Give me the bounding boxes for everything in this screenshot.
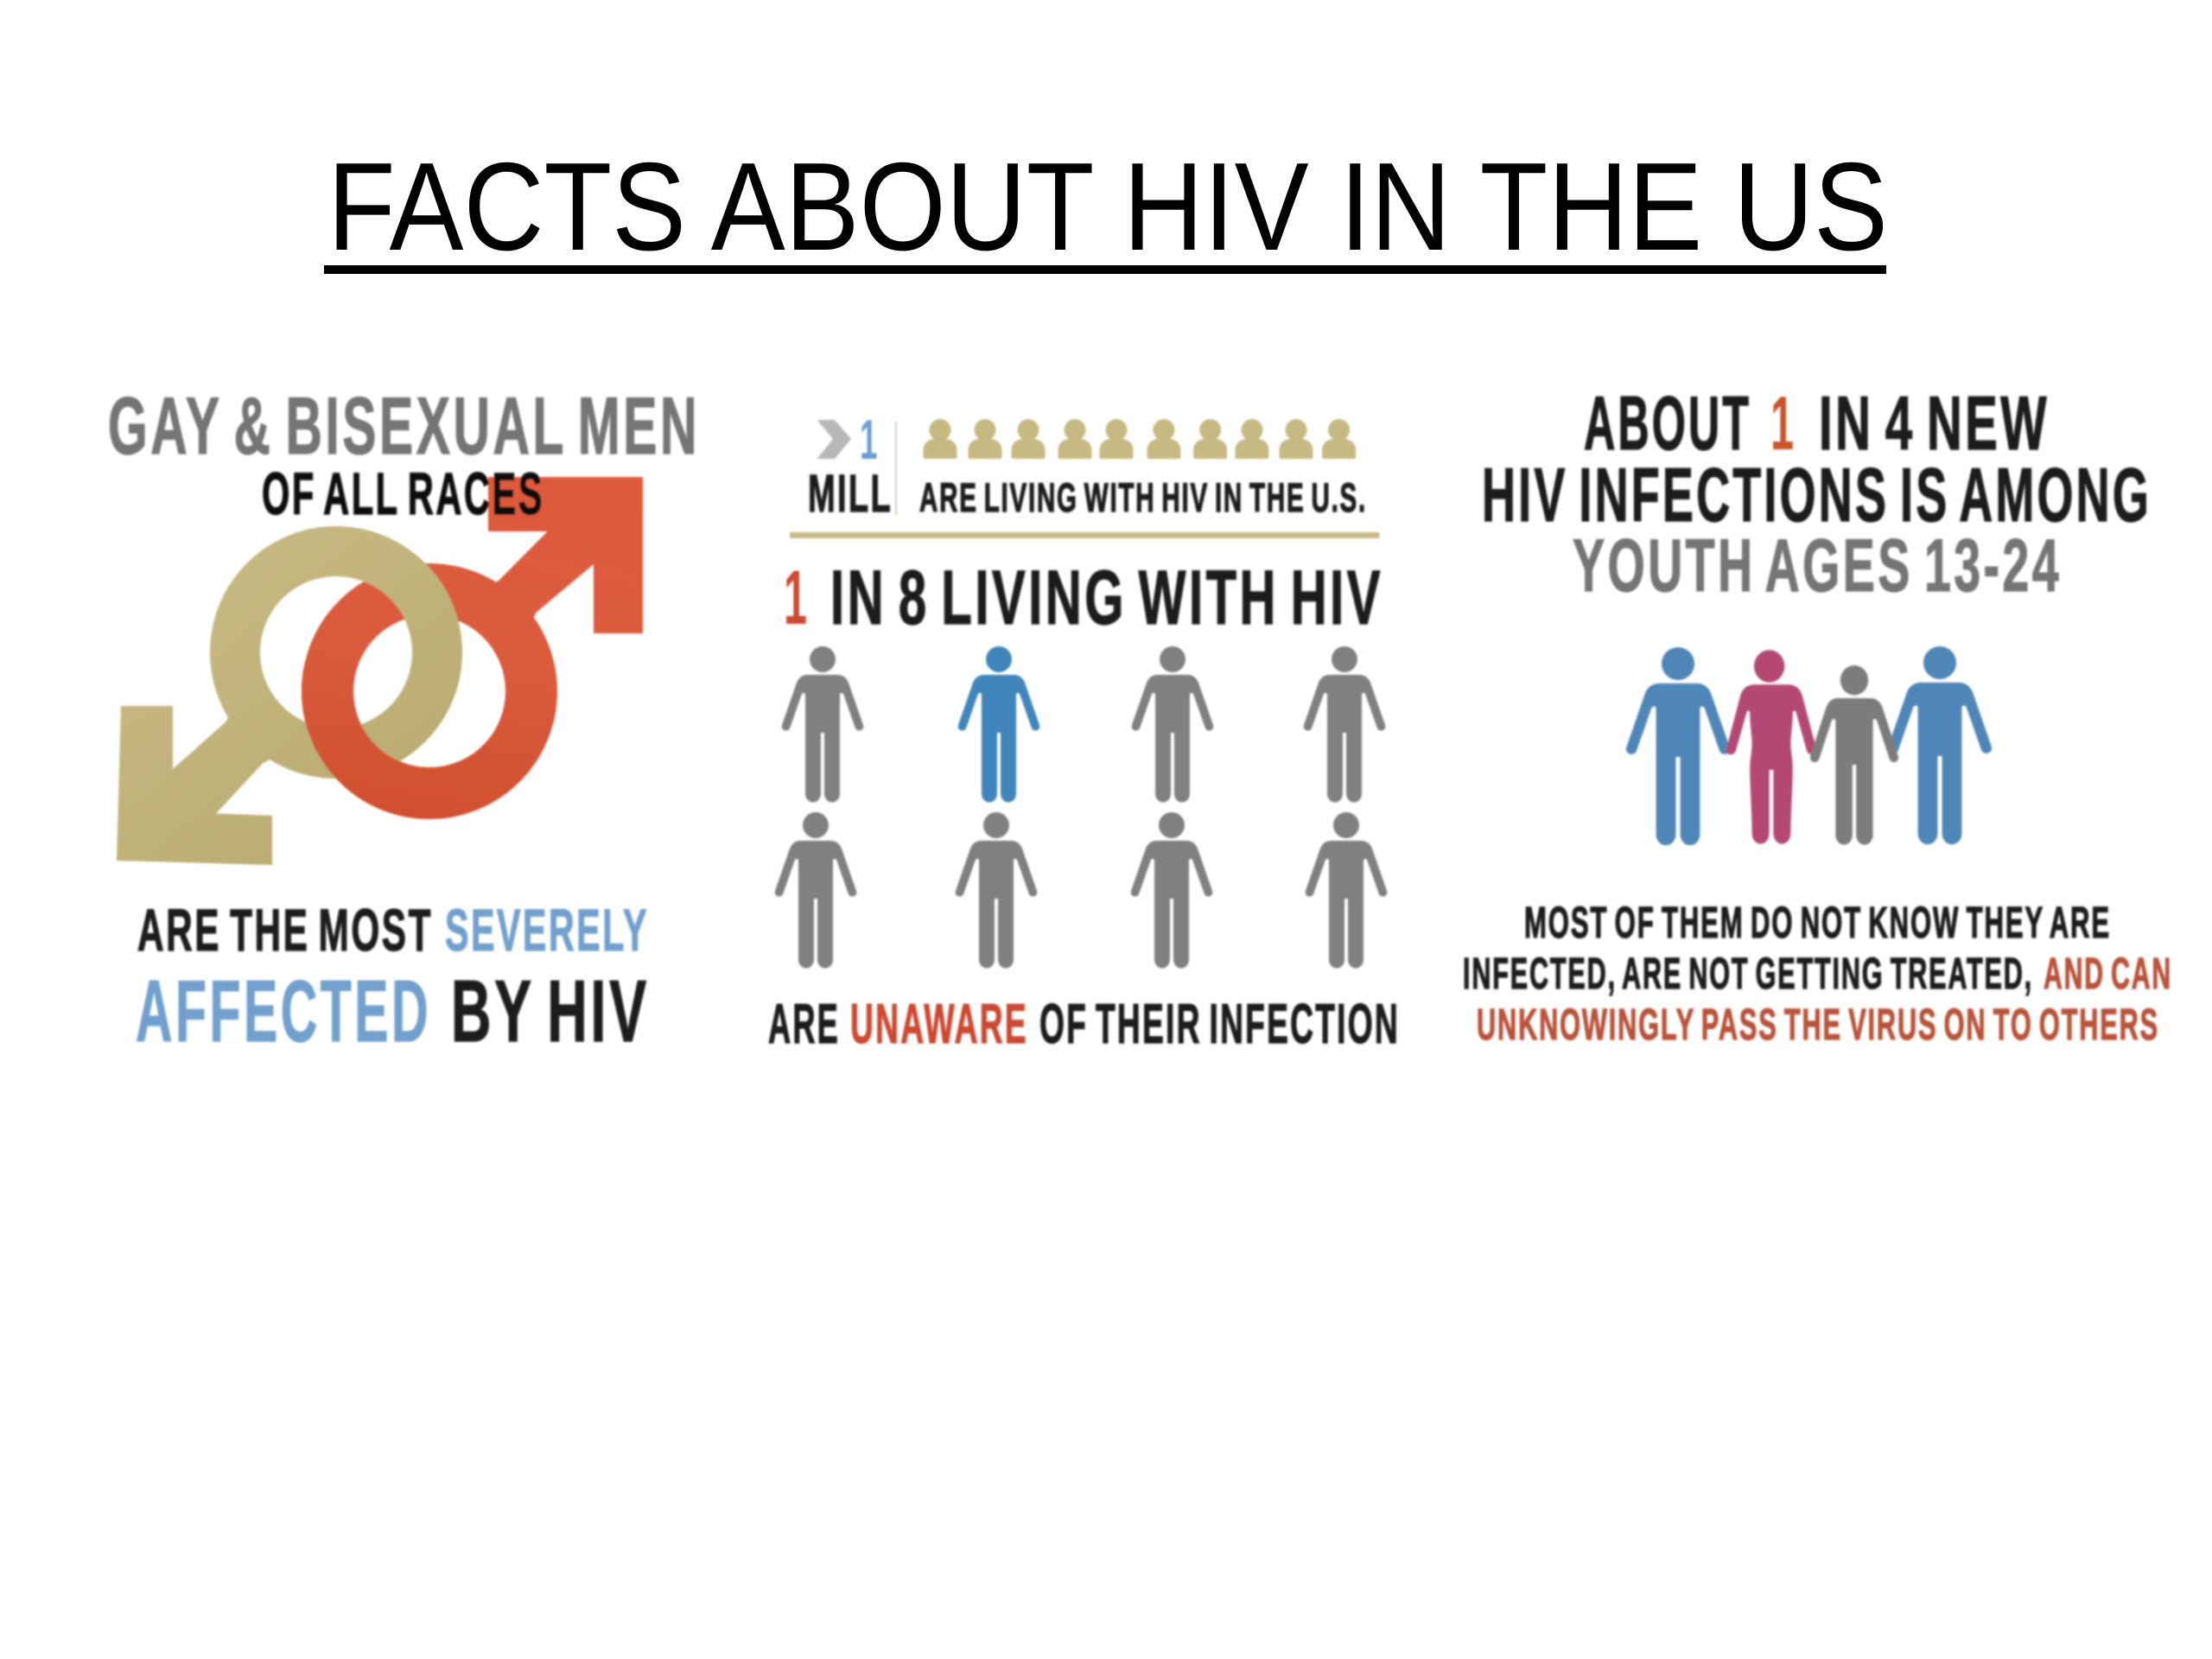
heading: about 1 in 4 new bbox=[1584, 380, 2050, 466]
heading: about 1 in 4 new: IN 4 NEW bbox=[1819, 380, 2050, 466]
heading: 1 in 8 living with hiv bbox=[784, 554, 1383, 640]
panel: gay and bisexual men bbox=[108, 380, 700, 1060]
heading: gay and bisexual men: GAY & BISEXUAL MEN bbox=[108, 380, 700, 471]
heading: 1 in 8 living with hiv: 1 bbox=[784, 554, 807, 640]
pictogram: eight people, one blue bbox=[775, 646, 1387, 968]
title: FACTS ABOUT HIV IN THE US bbox=[327, 137, 1888, 276]
text: are the most severely: SEVERELY bbox=[445, 897, 649, 963]
stat: more than 1 million: 1 bbox=[860, 408, 878, 471]
icon row: ten tan people bbox=[923, 419, 1356, 459]
text: are unaware of their infection: UNAWARE bbox=[850, 992, 1028, 1055]
stat: more than 1 million: MILL bbox=[808, 464, 893, 523]
heading: about 1 in 4 new: ABOUT bbox=[1584, 380, 1751, 466]
text: affected by hiv: BY HIV bbox=[451, 963, 650, 1060]
text: are living with hiv: ARE LIVING WITH HIV IN THE U.S. bbox=[919, 474, 1367, 520]
heading: about 1 in 4 new: 1 bbox=[1770, 380, 1794, 466]
stat: more than 1 million bbox=[808, 408, 897, 523]
panel: youth ages 13-24 bbox=[1463, 380, 2172, 1049]
pictogram: four youths holding hands bbox=[1626, 646, 1992, 845]
subheading: of all races: OF ALL RACES bbox=[262, 461, 544, 527]
heading: 1 in 8 living with hiv: IN 8 LIVING WITH HIV bbox=[830, 554, 1383, 640]
text: are unaware of their infection: OF THEIR INFECTION bbox=[1039, 992, 1400, 1055]
text: are unaware of their infection: ARE bbox=[768, 992, 840, 1055]
panel: one in eight unaware bbox=[768, 408, 1400, 1055]
text: are the most severely: ARE THE MOST bbox=[137, 897, 433, 963]
text: affected by hiv: AFFECTED bbox=[136, 963, 431, 1060]
text: are unaware of their infection bbox=[768, 992, 1400, 1055]
icon: interlocked male symbols bbox=[117, 477, 643, 865]
